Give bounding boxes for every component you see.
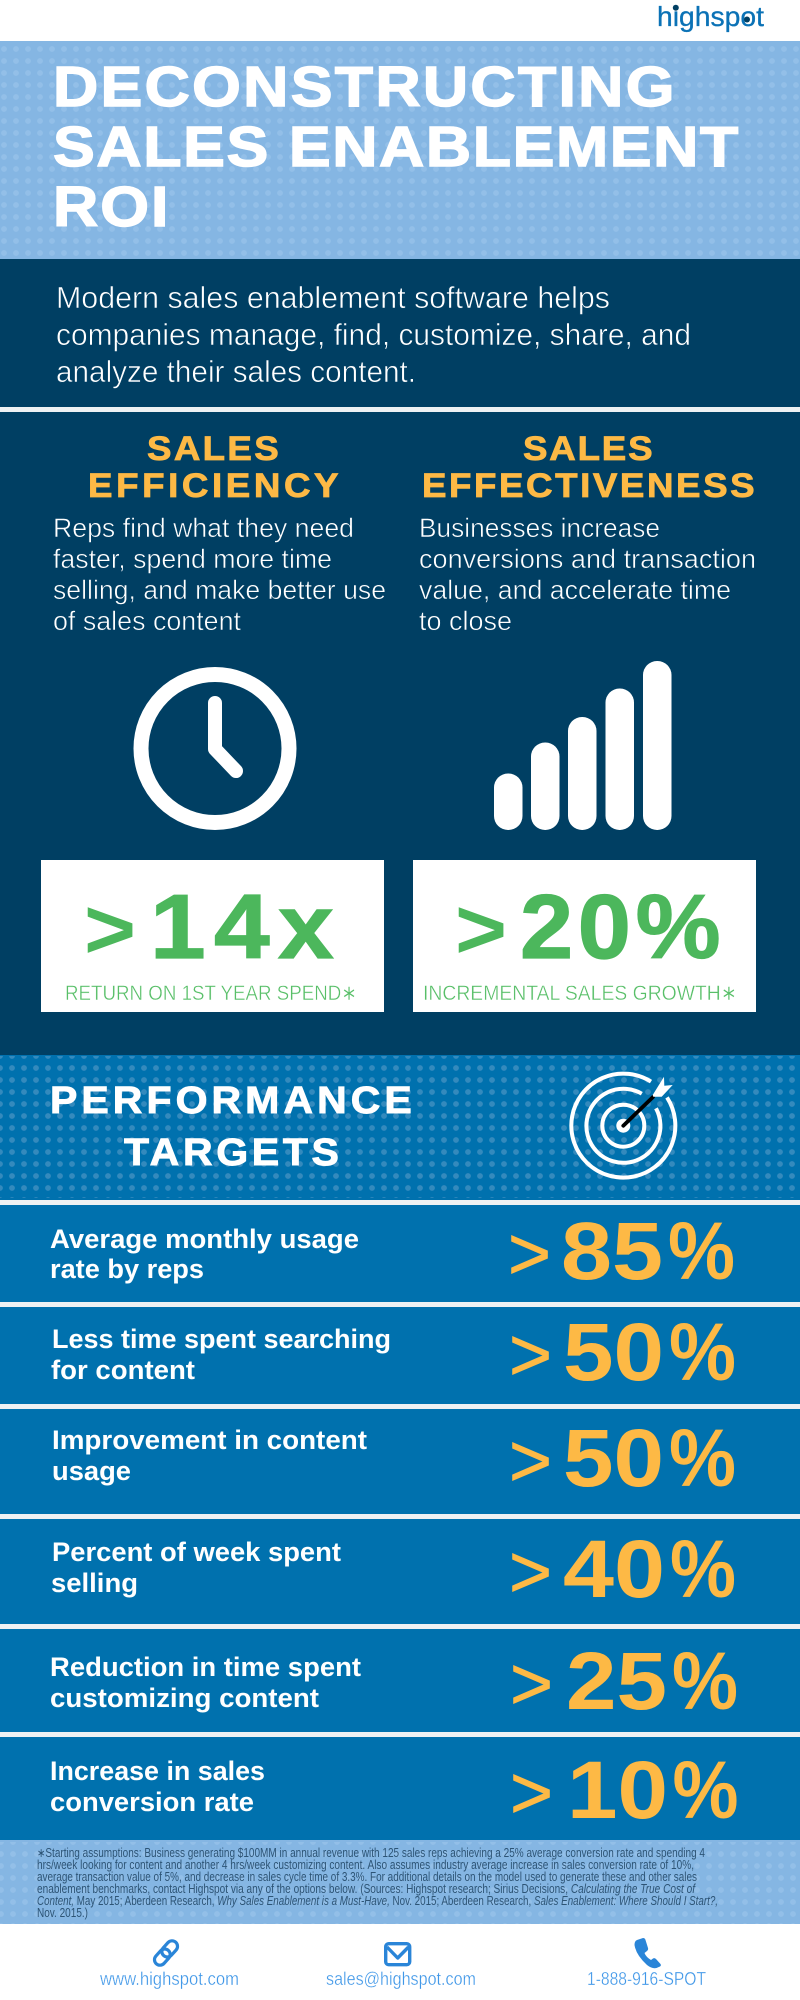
heading: sales effectiveness [422,430,755,505]
icon: envelope [386,1944,410,1965]
row: increase in conversion rate: Increase in sales [50,1756,265,1786]
footnote text: enablement benchmarks, contact Highspot via any of the options below. (Sources: Highspot research; Sirius Decisions, Calculating the True Cost of [37,1882,696,1896]
column: sales efficiency [41,430,386,1012]
row: less time searching: Less time spent searching [52,1324,391,1354]
stat card: incremental sales growth [413,860,756,1012]
row: percent of week selling [0,1519,800,1624]
row: reduction in customizing time: Reduction in time spent [50,1652,361,1682]
stat card: incremental sales growth: > [455,882,507,976]
row: average monthly usage: Average monthly usage [50,1224,359,1254]
panel: efficiency and effectiveness [0,412,800,1055]
heading: sales efficiency: EFFICIENCY [88,467,339,505]
row: increase in conversion rate: > [510,1751,553,1834]
contact: website: www.highspot.com [99,1968,239,1989]
row: improvement in content usage: usage [52,1456,131,1486]
effectiveness description: to close [419,606,512,636]
row: reduction in customizing time: > [510,1642,553,1725]
stat card: return on first year spend: 14x [150,876,334,978]
footnote text: Content, May 2015; Aberdeen Research, Why Sales Enablement is a Must-Have, Nov. 2015; Aberdeen Research, Sales Enablement: Where Should I Start?, [37,1894,718,1908]
heading: sales efficiency [88,430,339,505]
intro text: analyze their sales content. [56,354,416,389]
efficiency description: Reps find what they need [53,513,354,543]
row: reduction in customizing time: customizing content [50,1683,319,1713]
efficiency description: selling, and make better use [53,575,386,605]
panel: target rows [0,1205,800,1840]
footnote text: Nov. 2015.) [37,1906,88,1920]
stat card: incremental sales growth: INCREMENTAL SALES GROWTH∗ [423,981,737,1005]
intro text: companies manage, find, customize, share, and [56,317,691,352]
icon: clock [141,674,289,822]
row: less time searching [0,1307,800,1404]
contact: phone: 1-888-916-SPOT [587,1968,706,1989]
panel: performance targets header [0,1055,800,1200]
heading: sales effectiveness: SALES [523,430,653,468]
intro text [56,280,691,389]
icon: signal bars [494,661,672,830]
title heading: DECONSTRUCTING [53,55,675,118]
contact: website [99,1939,239,1989]
heading: sales effectiveness: EFFECTIVENESS [422,467,755,505]
row: improvement in content usage: > [509,1419,552,1502]
efficiency description: faster, spend more time [53,544,332,574]
contact: email [326,1944,476,1989]
row: less time searching: for content [51,1355,195,1385]
row: average monthly usage [0,1205,800,1302]
row: less time searching: % [669,1307,736,1398]
row: less time searching: > [509,1313,552,1396]
row: reduction in customizing time: % [672,1636,738,1727]
efficiency description: of sales content [53,606,241,636]
effectiveness description: value, and accelerate time [419,575,731,605]
stat card: return on first year spend: > [84,882,136,976]
heading: performance targets [50,1079,412,1174]
row: improvement in content usage [0,1409,800,1514]
title heading: SALES ENABLEMENT [53,115,738,178]
effectiveness description: Businesses increase [419,513,660,543]
row: percent of week selling: 40 [563,1524,665,1615]
panel: title banner [0,41,800,259]
row: increase in conversion rate: conversion rate [50,1787,254,1817]
stat card: incremental sales growth: 20% [520,876,721,978]
row: percent of week selling: > [509,1530,552,1613]
column: sales effectiveness [413,430,756,1012]
row: improvement in content usage: 50 [563,1413,664,1504]
row: increase in conversion rate: 10 [567,1745,668,1836]
row: average monthly usage: > [508,1212,551,1295]
row: percent of week selling: Percent of week spent [52,1537,341,1567]
row: average monthly usage: % [668,1206,735,1297]
row: improvement in content usage: Improvement in content [52,1425,367,1455]
row: increase in conversion rate: % [672,1745,738,1836]
title heading [53,55,738,238]
contact: phone [587,1938,706,1989]
title heading: ROI [53,175,168,238]
header: highspot logo: highspot [657,1,764,32]
panel: footnote [0,1840,800,1924]
heading: performance targets: TARGETS [124,1131,339,1174]
contact: email: sales@highspot.com [326,1968,476,1989]
row: reduction in customizing time: 25 [566,1636,667,1727]
divider band [0,407,800,412]
row: less time searching: 50 [563,1307,664,1398]
row: average monthly usage: rate by reps [50,1254,204,1284]
panel: introduction [0,259,800,407]
intro text: Modern sales enablement software helps [56,280,610,315]
row: percent of week selling: % [670,1524,736,1615]
icon: target with arrow [571,1074,675,1178]
icon: link [152,1939,180,1967]
heading: performance targets: PERFORMANCE [50,1079,412,1122]
icon: phone [634,1938,661,1968]
efficiency description [53,513,386,636]
effectiveness description [419,513,756,636]
panel: contact footer [99,1938,706,1989]
stat card: return on first year spend: RETURN ON 1ST YEAR SPEND∗ [65,981,357,1005]
effectiveness description: conversions and transaction [419,544,756,574]
row: increase in conversion rate [0,1737,800,1840]
row: improvement in content usage: % [669,1413,736,1504]
row: average monthly usage: 85 [561,1206,663,1297]
row: reduction in customizing time [0,1629,800,1732]
row: percent of week selling: selling [51,1568,138,1598]
divider band [0,1200,800,1205]
footnote text [37,1846,718,1920]
heading: sales efficiency: SALES [147,430,279,468]
stat card: return on first year spend [41,860,384,1012]
